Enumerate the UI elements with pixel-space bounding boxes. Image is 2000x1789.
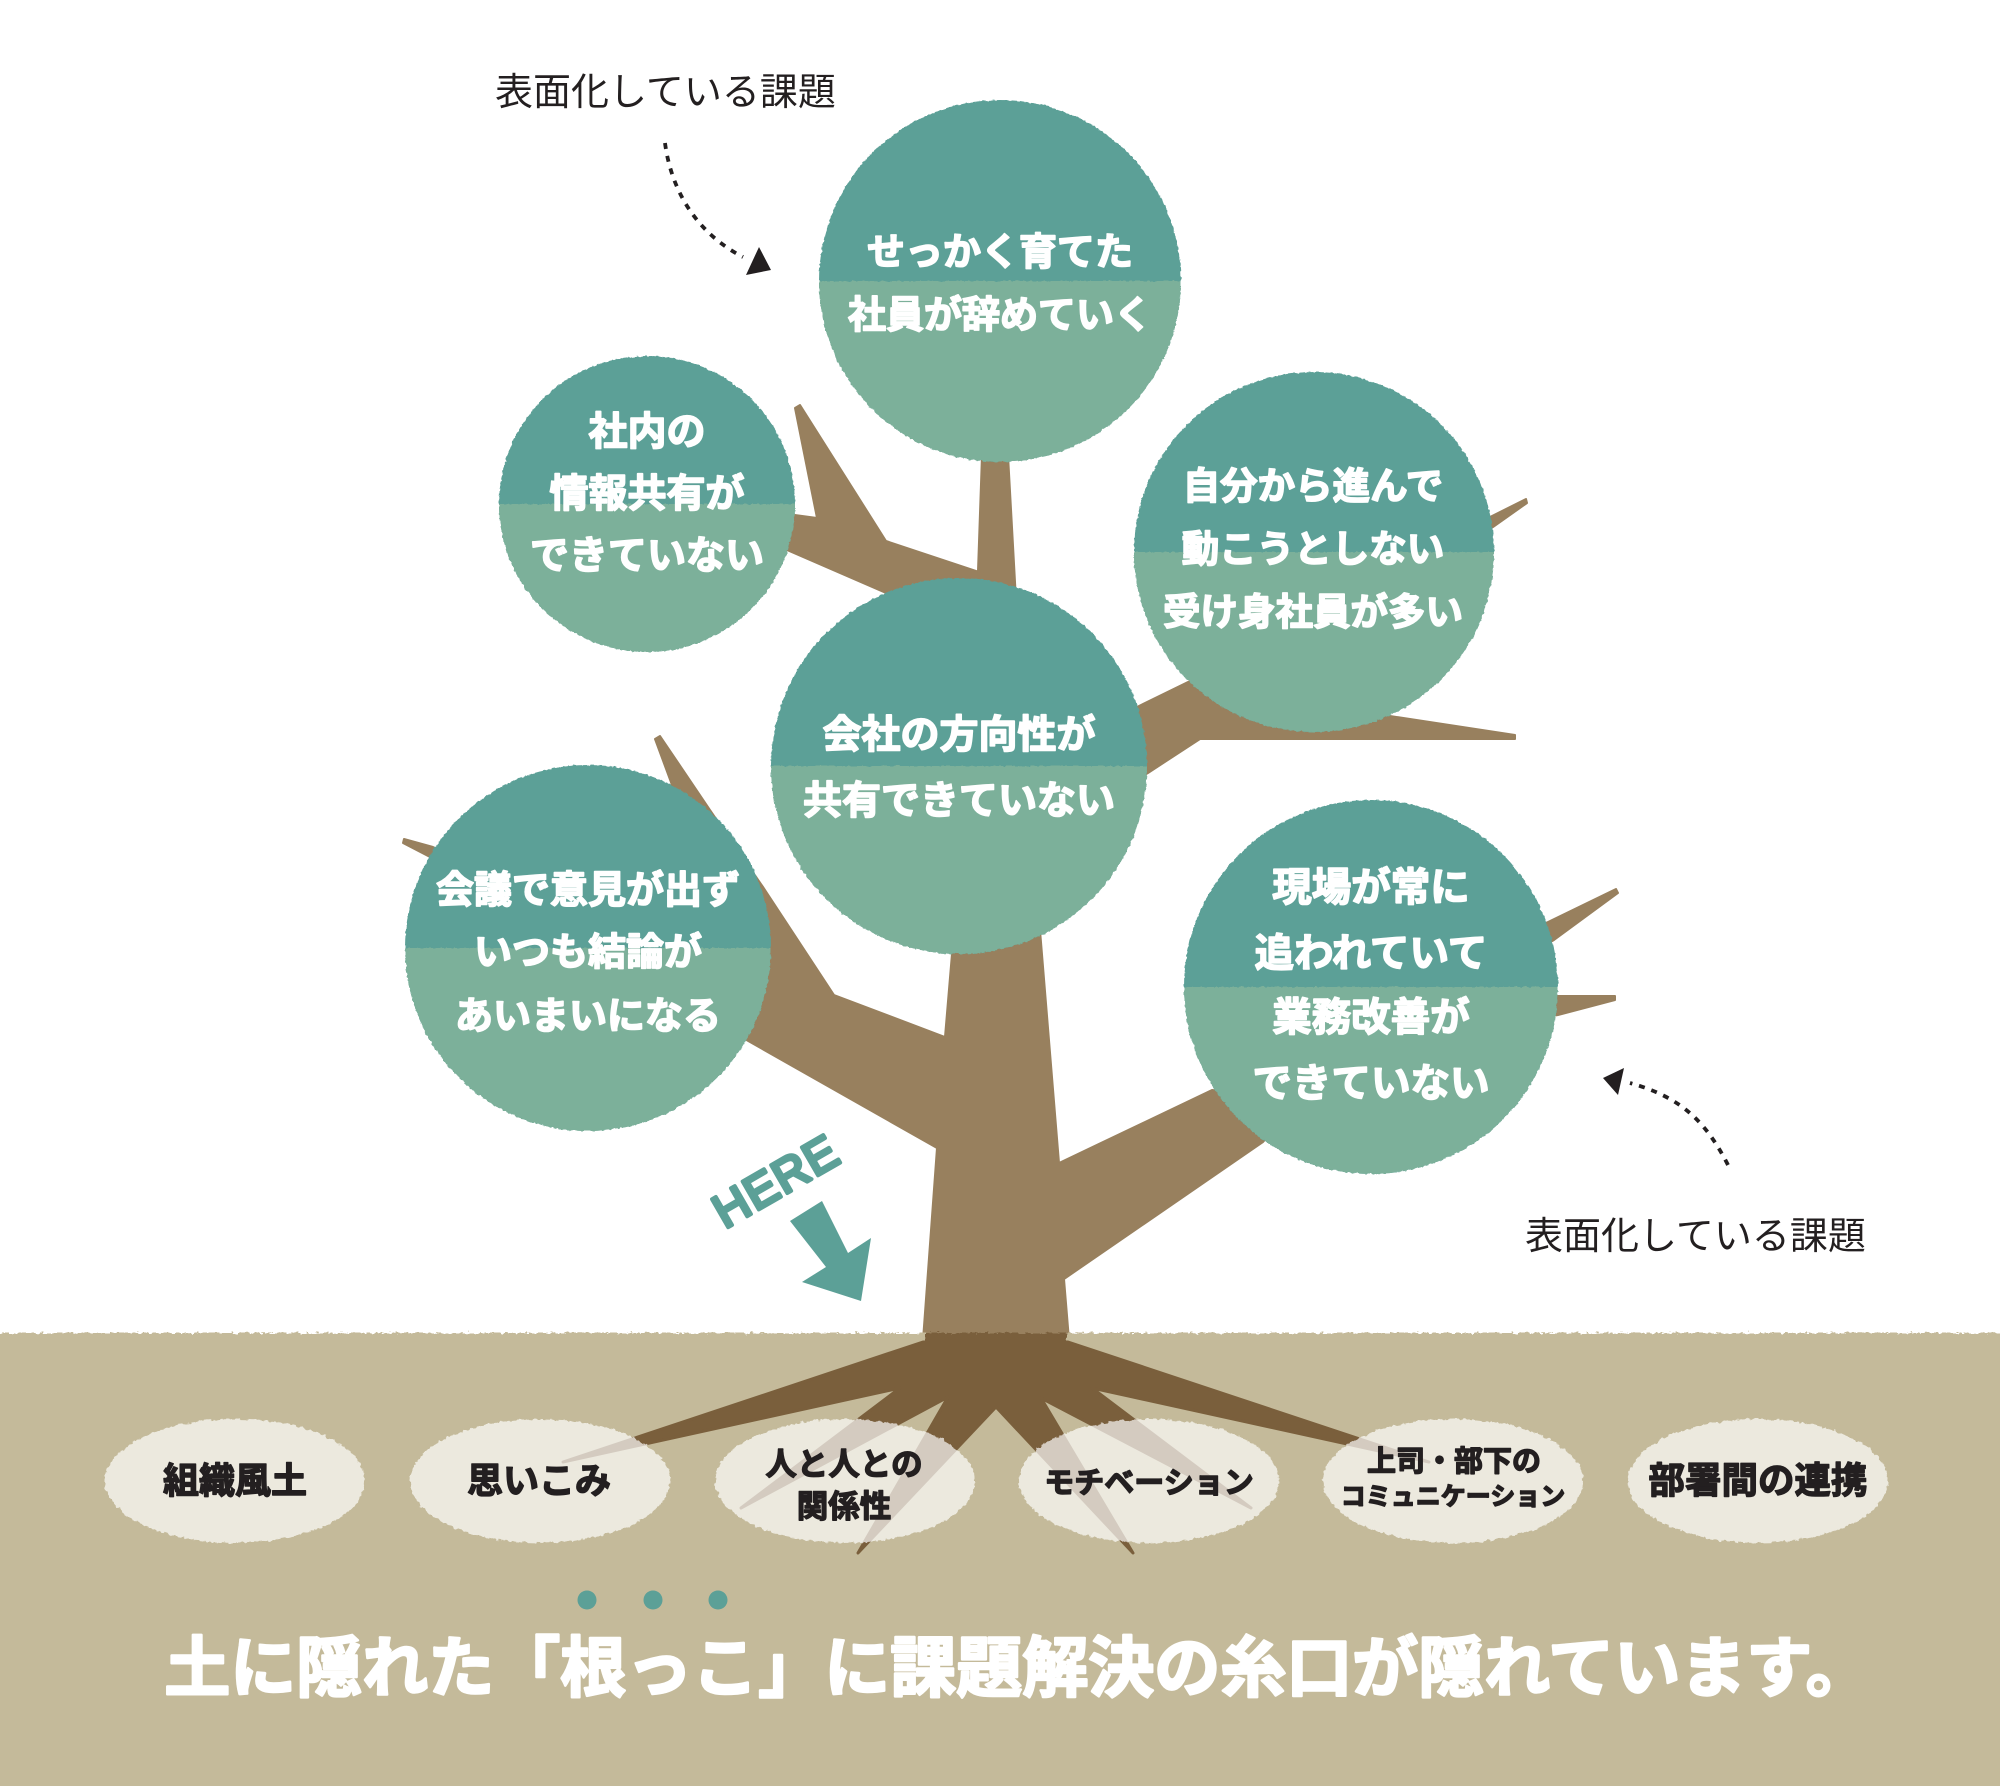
canopy: center circle: 共有できていない bbox=[803, 780, 1115, 823]
roots bbox=[563, 1333, 1429, 1553]
canopy: right circle: 受け身社員が多い bbox=[1163, 591, 1463, 633]
canopy: lower-right circle bbox=[1184, 800, 1558, 1174]
HERE label: HERE bbox=[703, 1124, 848, 1238]
oval: 組織風土 bbox=[105, 1419, 365, 1543]
oval: モチベーション: モチベーション bbox=[1044, 1467, 1254, 1500]
canopy: lower-left circle: あいまいになる bbox=[455, 996, 721, 1038]
canopy: left circle bbox=[499, 356, 795, 652]
canopy: lower-right circle: 現場が常に bbox=[1272, 866, 1470, 910]
canopy: lower-right circle: できていない bbox=[1252, 1062, 1490, 1106]
canopy: right circle: 自分から進んで bbox=[1183, 465, 1443, 507]
ground bbox=[0, 1333, 2000, 1786]
canopy: lower-left circle bbox=[405, 765, 771, 1131]
oval: 人と人との関係性: 人と人との bbox=[765, 1446, 923, 1482]
oval: 組織風土: 組織風土 bbox=[163, 1460, 307, 1501]
canopy: right circle bbox=[1134, 372, 1494, 732]
canopy: left circle: できていない bbox=[530, 535, 764, 578]
arrow: dashed top bbox=[665, 143, 771, 275]
oval: 人と人との関係性: 関係性 bbox=[797, 1488, 891, 1524]
canopy: top circle: 社員が辞めていく bbox=[848, 295, 1152, 337]
emphasis dots bbox=[578, 1590, 728, 1610]
oval: モチベーション bbox=[1019, 1419, 1279, 1543]
canopy: left circle: 情報共有が bbox=[549, 473, 745, 516]
canopy: lower-left circle: 会議で意見が出ず bbox=[436, 870, 740, 912]
oval: 思いこみ: 思いこみ bbox=[467, 1460, 611, 1501]
headline: 土に隠れた「根っこ」に課題解決の糸口が隠れています。 bbox=[164, 1631, 1872, 1705]
arrow: HERE bbox=[790, 1201, 871, 1301]
canopy: top circle: せっかく育てた bbox=[867, 232, 1133, 274]
canopy: center circle bbox=[771, 578, 1147, 954]
canopy: lower-right circle: 業務改善が bbox=[1272, 996, 1470, 1040]
canopy: lower-right circle: 追われていて bbox=[1255, 932, 1487, 976]
oval: 上司・部下のコミュニケーション bbox=[1323, 1419, 1583, 1543]
label: surface issues right: 表面化している課題 bbox=[1525, 1216, 1866, 1258]
tree trunk and branches bbox=[403, 405, 1618, 1340]
arrow: dashed right bbox=[1603, 1068, 1728, 1165]
canopy: left circle: 社内の bbox=[588, 411, 706, 454]
label: surface issues top: 表面化している課題 bbox=[495, 72, 836, 114]
oval: 上司・部下のコミュニケーション: 上司・部下の bbox=[1367, 1445, 1541, 1478]
canopy: top circle bbox=[819, 100, 1181, 462]
canopy: center circle: 会社の方向性が bbox=[822, 714, 1096, 757]
oval: 部署間の連携 bbox=[1628, 1419, 1888, 1543]
canopy: lower-left circle: いつも結論が bbox=[474, 932, 702, 974]
oval: 上司・部下のコミュニケーション: コミュニケーション bbox=[1341, 1483, 1565, 1511]
oval: 部署間の連携: 部署間の連携 bbox=[1648, 1460, 1868, 1501]
canopy: right circle: 動こうとしない bbox=[1182, 528, 1444, 570]
oval: 思いこみ bbox=[410, 1419, 670, 1543]
oval: 人と人との関係性 bbox=[715, 1419, 975, 1543]
